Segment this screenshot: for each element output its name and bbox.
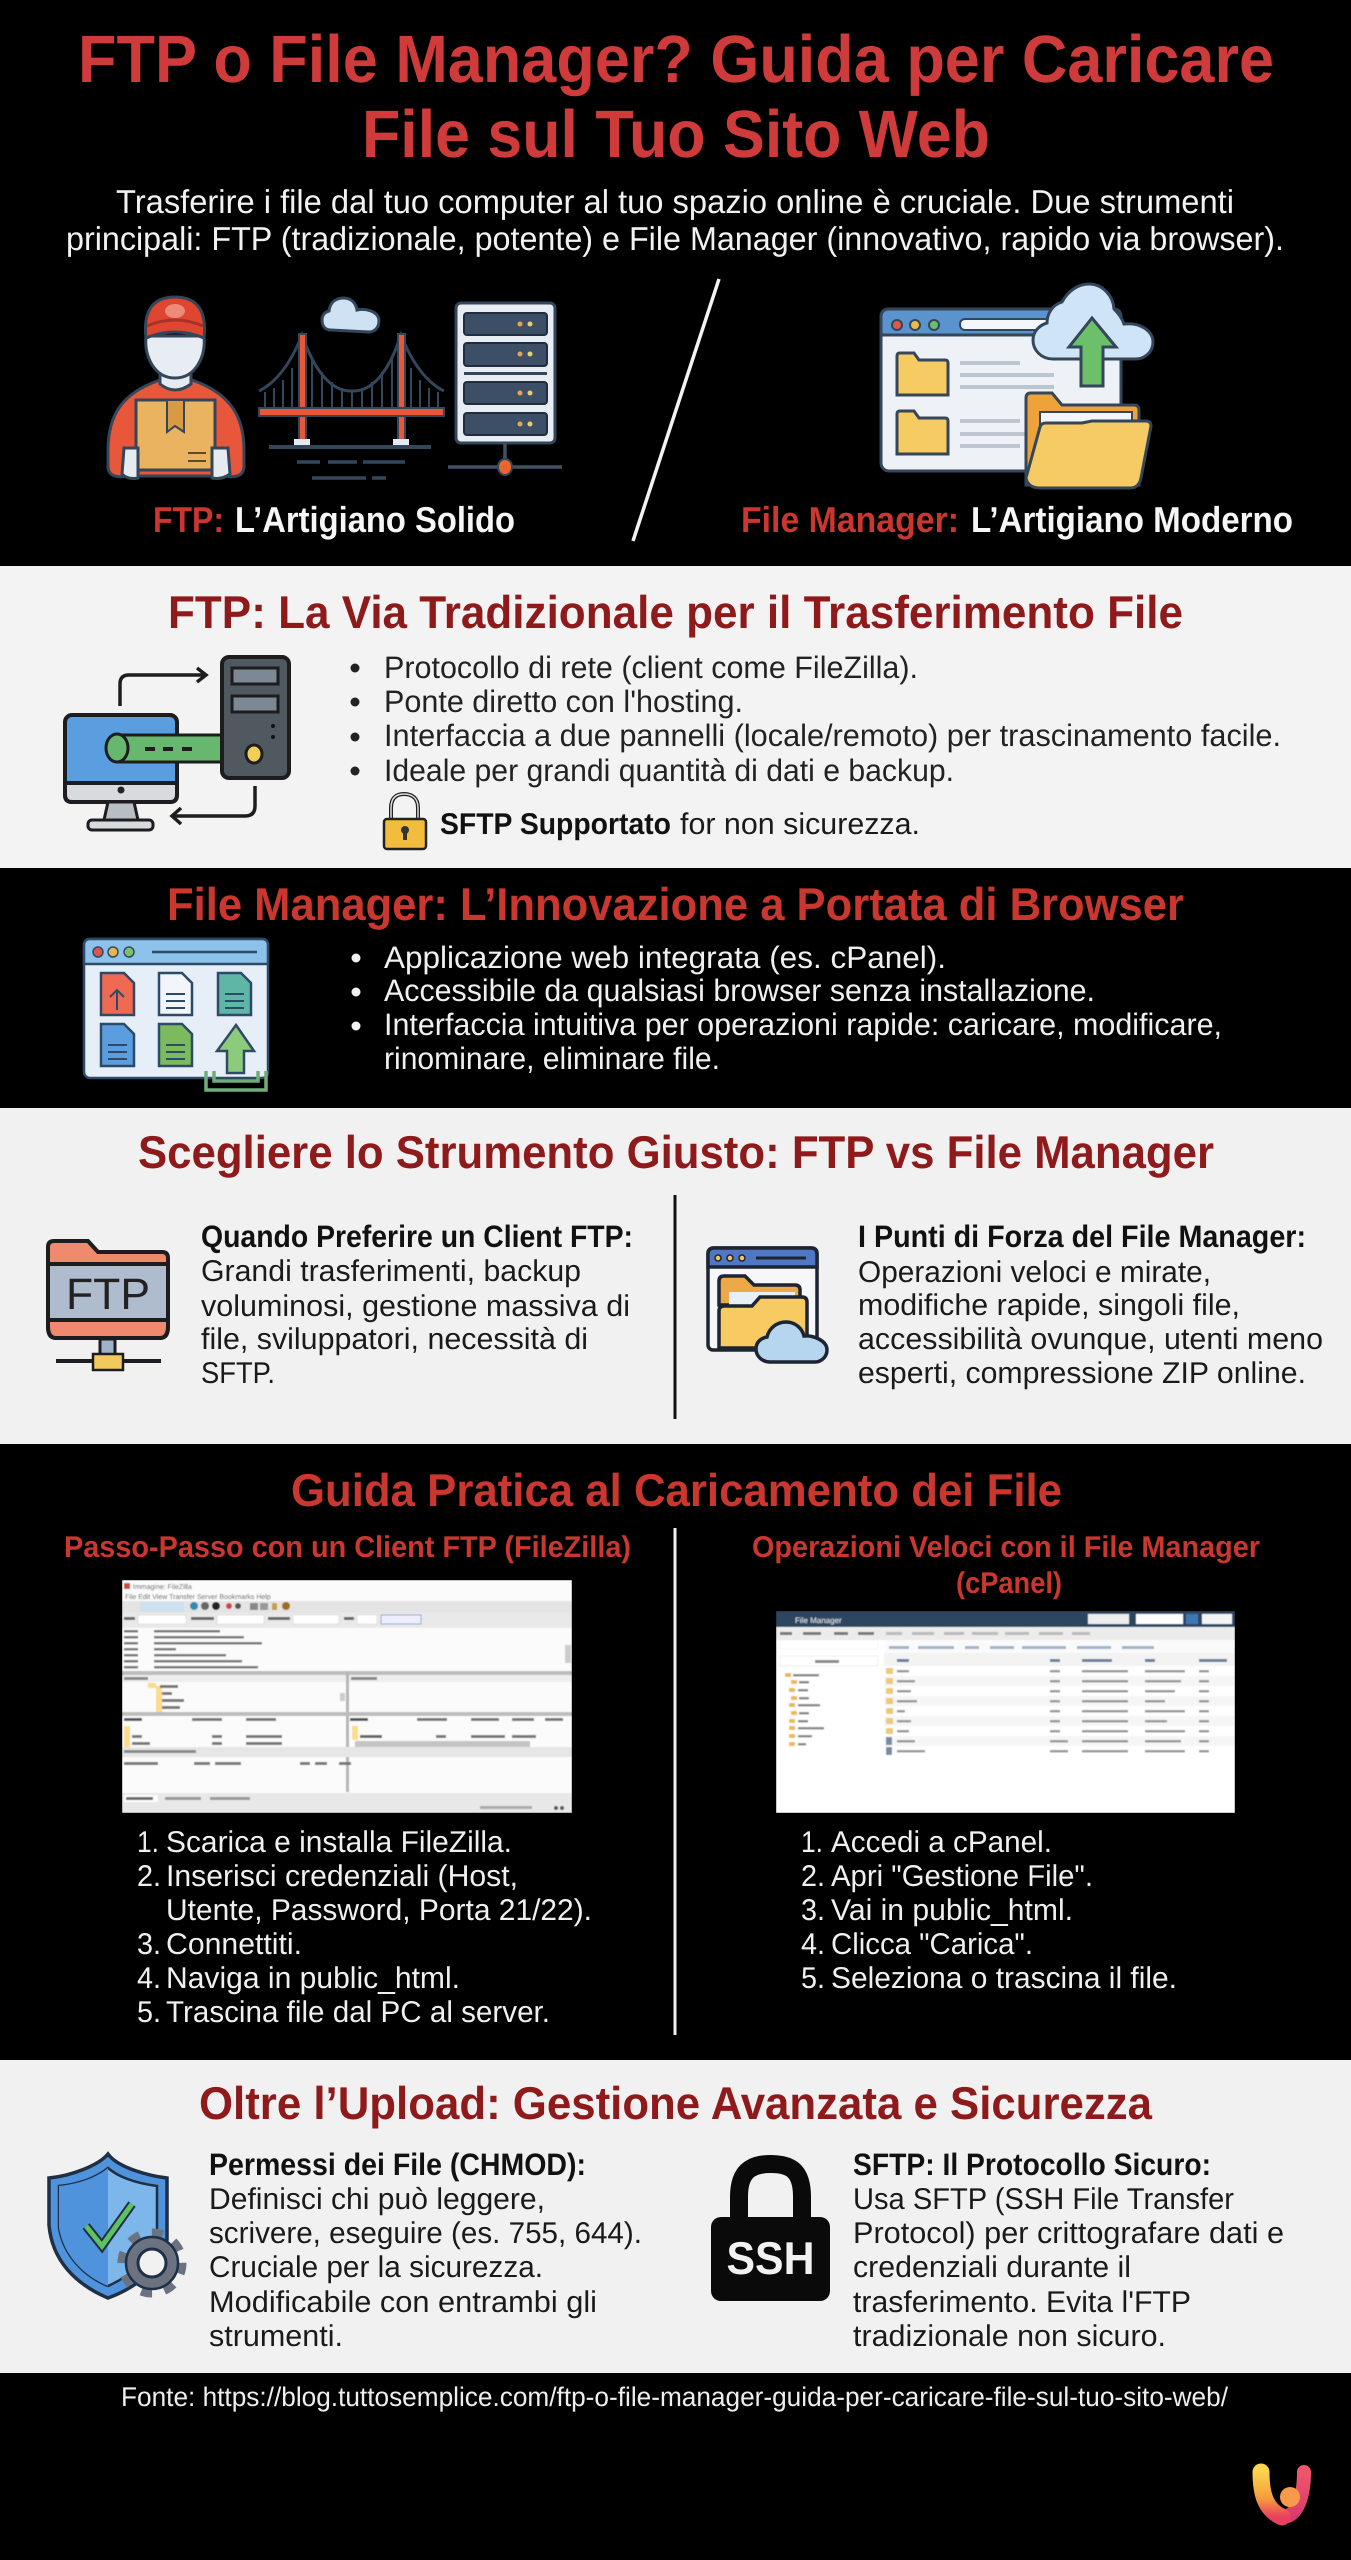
steps: File Manager: Accedi a cPanel.: [831, 1826, 1052, 1859]
subheading: file manager: (cPanel): [956, 1567, 1062, 1600]
text block: FTP client: voluminosi, gestione massiva di: [201, 1290, 630, 1323]
intro text: Trasferire i file dal tuo computer al tuo spazio online è cruciale. Due strumenti: [116, 183, 1234, 220]
text block: CHMOD: scrivere, eseguire (es. 755, 644).: [209, 2217, 642, 2250]
screenshot: FileZilla: [122, 1580, 572, 1813]
screenshot: FileZilla: Immagine: FileZilla: [133, 1583, 192, 1591]
column divider: [674, 1195, 676, 1419]
label: File Manager: File Manager:: [741, 499, 959, 540]
steps: FTP client: Inserisci credenziali (Host,: [166, 1860, 518, 1893]
steps: File Manager: [801, 1826, 1177, 1995]
icon: delivery person with box: [108, 297, 244, 478]
divider slash: [633, 279, 719, 541]
text block: CHMOD: Definisci chi può leggere,: [209, 2183, 545, 2216]
subheading: file manager: Operazioni Veloci con il File Manager: [752, 1531, 1260, 1564]
bullet list: Accessibile da qualsiasi browser senza installazione.: [384, 973, 1095, 1008]
SFTP note: SFTP Supportato: [440, 808, 671, 841]
text block: SFTP: credenziali durante il: [853, 2251, 1131, 2284]
text block: File Manager strengths: accessibilità ovunque, utenti meno: [858, 1323, 1323, 1356]
text block: SFTP: Protocol) per crittografare dati e: [853, 2217, 1284, 2250]
panel: File Manager innovation: [0, 868, 1351, 1108]
icon: SSH padlock: [711, 2164, 830, 2301]
steps: File Manager: 5.: [801, 1962, 825, 1995]
steps: File Manager: 1.: [801, 1826, 823, 1859]
logo: [1261, 2472, 1304, 2517]
text block: CHMOD: Permessi dei File (CHMOD):: [209, 2147, 586, 2182]
text block: FTP client: Quando Preferire un Client FTP:: [201, 1219, 633, 1254]
label: File Manager: [741, 499, 1293, 540]
heading: Guida Pratica al Caricamento dei File: [291, 1464, 1062, 1516]
bullet list: Interfaccia intuitiva per operazioni rapide: caricare, modificare,: [384, 1007, 1222, 1042]
text block: File Manager strengths: modifiche rapide, singoli file,: [858, 1289, 1240, 1322]
text block: SFTP: trasferimento. Evita l'FTP: [853, 2286, 1191, 2319]
subheading: FTP client: Passo-Passo con un Client FTP (FileZilla): [64, 1531, 631, 1564]
steps: FTP client: 3.: [137, 1928, 161, 1961]
text block: File Manager strengths: [858, 1219, 1323, 1390]
icon: shield with gear: [49, 2154, 182, 2298]
icon: computer connected to server: [65, 657, 289, 830]
text block: FTP client: SFTP.: [201, 1357, 275, 1390]
icon: browser folder cloud: [708, 1248, 827, 1362]
steps: File Manager: 3.: [801, 1894, 825, 1927]
icon label: FTP: FTP: [66, 1270, 150, 1319]
text block: FTP client: Grandi trasferimenti, backup: [201, 1255, 581, 1288]
steps: FTP client: 4.: [137, 1962, 161, 1995]
screenshot: cPanel file manager: File Manager: [795, 1616, 842, 1625]
panel: FTP traditional: [0, 566, 1351, 868]
icon: server rack: [448, 303, 562, 475]
intro text: [66, 183, 1284, 257]
bullet list: [350, 650, 1281, 788]
steps: FTP client: 2.: [137, 1860, 161, 1893]
steps: File Manager: 2.: [801, 1860, 825, 1893]
bullet list: Applicazione web integrata (es. cPanel).: [384, 940, 946, 975]
icon: FTP folder: [48, 1241, 168, 1370]
bullet list: Ponte diretto con l'hosting.: [384, 684, 743, 719]
icon: file manager window with cloud upload: [881, 284, 1153, 488]
text block: File Manager strengths: esperti, compressione ZIP online.: [858, 1357, 1306, 1390]
steps: FTP client: Naviga in public_html.: [166, 1962, 460, 1995]
steps: FTP client: 1.: [137, 1826, 159, 1859]
bullet list: Ideale per grandi quantità di dati e backup.: [384, 753, 954, 788]
panel: choosing the right tool: [0, 1108, 1351, 1444]
steps: FTP client: Scarica e installa FileZilla.: [166, 1826, 512, 1859]
column divider: [674, 1528, 676, 2035]
bullet list: Interfaccia a due pannelli (locale/remoto) per trascinamento facile.: [384, 718, 1281, 753]
steps: File Manager: Seleziona o trascina il file.: [831, 1962, 1177, 1995]
steps: File Manager: Vai in public_html.: [831, 1894, 1073, 1927]
steps: FTP client: 5.: [137, 1996, 161, 2029]
label: FTP: FTP:: [153, 499, 224, 540]
text block: CHMOD: [209, 2147, 642, 2353]
steps: File Manager: Apri "Gestione File".: [831, 1860, 1093, 1893]
title: [78, 22, 1274, 172]
subheading: file manager: [752, 1531, 1260, 1600]
heading: Scegliere lo Strumento Giusto: FTP vs File Manager: [138, 1126, 1214, 1178]
text block: SFTP: SFTP: Il Protocollo Sicuro:: [853, 2147, 1211, 2182]
icon: SSH padlock: SSH: [726, 2232, 814, 2284]
steps: File Manager: Clicca "Carica".: [831, 1928, 1033, 1961]
steps: FTP client: Utente, Password, Porta 21/22).: [166, 1894, 592, 1927]
text block: File Manager strengths: Operazioni veloci e mirate,: [858, 1256, 1211, 1289]
panel: header: [66, 22, 1293, 541]
SFTP note: [440, 808, 920, 841]
icon: padlock: [384, 794, 426, 849]
text block: CHMOD: strumenti.: [209, 2320, 343, 2353]
text block: SFTP: [853, 2147, 1284, 2353]
steps: FTP client: Trascina file dal PC al server.: [166, 1996, 550, 2029]
heading: FTP: La Via Tradizionale per il Trasferimento File: [168, 586, 1183, 638]
text block: FTP client: file, sviluppatori, necessità di: [201, 1323, 588, 1356]
steps: FTP client: Connettiti.: [166, 1928, 302, 1961]
bullet list: [352, 940, 1222, 1076]
intro text: principali: FTP (tradizionale, potente) e File Manager (innovativo, rapido via browser).: [66, 220, 1284, 257]
text block: File Manager strengths: I Punti di Forza del File Manager:: [858, 1219, 1306, 1254]
heading: File Manager: L’Innovazione a Portata di Browser: [167, 878, 1184, 930]
title: FTP o File Manager? Guida per Caricare: [78, 22, 1274, 97]
SFTP note: for non sicurezza.: [680, 808, 920, 841]
screenshot: FileZilla: File Edit View Transfer Server Bookmarks Help: [125, 1593, 271, 1601]
icon: suspension bridge with cloud: [259, 298, 444, 478]
bullet list: rinominare, eliminare file.: [384, 1041, 720, 1076]
label: FTP: L’Artigiano Solido: [235, 499, 515, 540]
footer source: Fonte: https://blog.tuttosemplice.com/ftp-o-file-manager-guida-per-caricare-file-sul-tuo-sito-web/: [121, 2382, 1228, 2412]
icon: browser window with files: [84, 939, 268, 1090]
text block: CHMOD: Cruciale per la sicurezza.: [209, 2251, 543, 2284]
label: File Manager: L’Artigiano Moderno: [971, 499, 1293, 540]
heading: Oltre l’Upload: Gestione Avanzata e Sicurezza: [199, 2077, 1152, 2129]
steps: File Manager: 4.: [801, 1928, 825, 1961]
steps: FTP client: [137, 1826, 592, 2029]
text block: SFTP: Usa SFTP (SSH File Transfer: [853, 2183, 1234, 2216]
panel: practical guide: [0, 1444, 1351, 2060]
text block: CHMOD: Modificabile con entrambi gli: [209, 2286, 597, 2319]
screenshot: cPanel file manager: [776, 1611, 1235, 1813]
text block: SFTP: tradizionale non sicuro.: [853, 2320, 1166, 2353]
panel: advanced management and security: [0, 2060, 1351, 2373]
bullet list: Protocollo di rete (client come FileZilla).: [384, 650, 918, 685]
title: File sul Tuo Sito Web: [362, 97, 990, 172]
text block: FTP client: [201, 1219, 633, 1390]
